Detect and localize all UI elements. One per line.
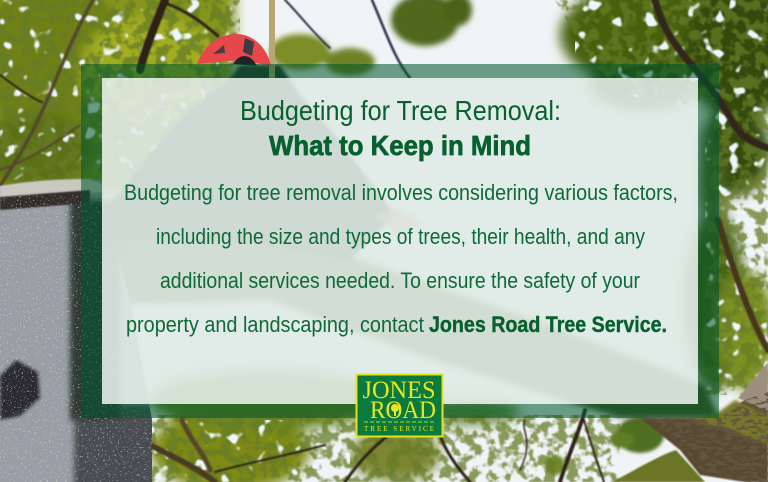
body line 3: additional services needed. To ensure the safety of your xyxy=(160,268,640,293)
heading xyxy=(240,95,561,161)
foliage: upper left xyxy=(0,0,235,195)
logo divider xyxy=(364,421,435,423)
body paragraph xyxy=(124,180,678,337)
heading line 1: Budgeting for Tree Removal: xyxy=(240,95,561,126)
leaf clump near trunk xyxy=(545,417,664,475)
arborist body xyxy=(102,65,395,260)
large cut branch under panel xyxy=(102,215,719,418)
rope xyxy=(269,0,275,78)
company name: Jones Road Tree Service. xyxy=(429,312,667,337)
body line 2: including the size and types of trees, their health, and any xyxy=(156,224,645,249)
orange chainsaw xyxy=(375,208,420,238)
body line 4: property and landscaping, contact xyxy=(126,312,424,337)
logo JONES: JONES xyxy=(362,377,436,404)
logo ROAD: ROAD xyxy=(370,397,436,424)
logo badge xyxy=(356,374,442,436)
logo TREE SERVICE: TREE SERVICE xyxy=(364,425,434,433)
tree trunk: bottom right xyxy=(612,360,768,482)
aerial lift bucket xyxy=(0,179,164,482)
foliage: right side xyxy=(560,0,768,390)
logo: Jones Road Tree Service xyxy=(356,374,442,436)
red helmet xyxy=(197,34,271,66)
logo tree icon xyxy=(391,404,399,416)
translucent white panel xyxy=(102,78,698,404)
foliage: upper centre clumps xyxy=(270,0,472,76)
foliage: bottom xyxy=(150,370,520,482)
body line 1: Budgeting for tree removal involves considering various factors, xyxy=(124,180,678,205)
heading line 2: What to Keep in Mind xyxy=(269,130,531,161)
translucent green frame xyxy=(81,64,719,418)
